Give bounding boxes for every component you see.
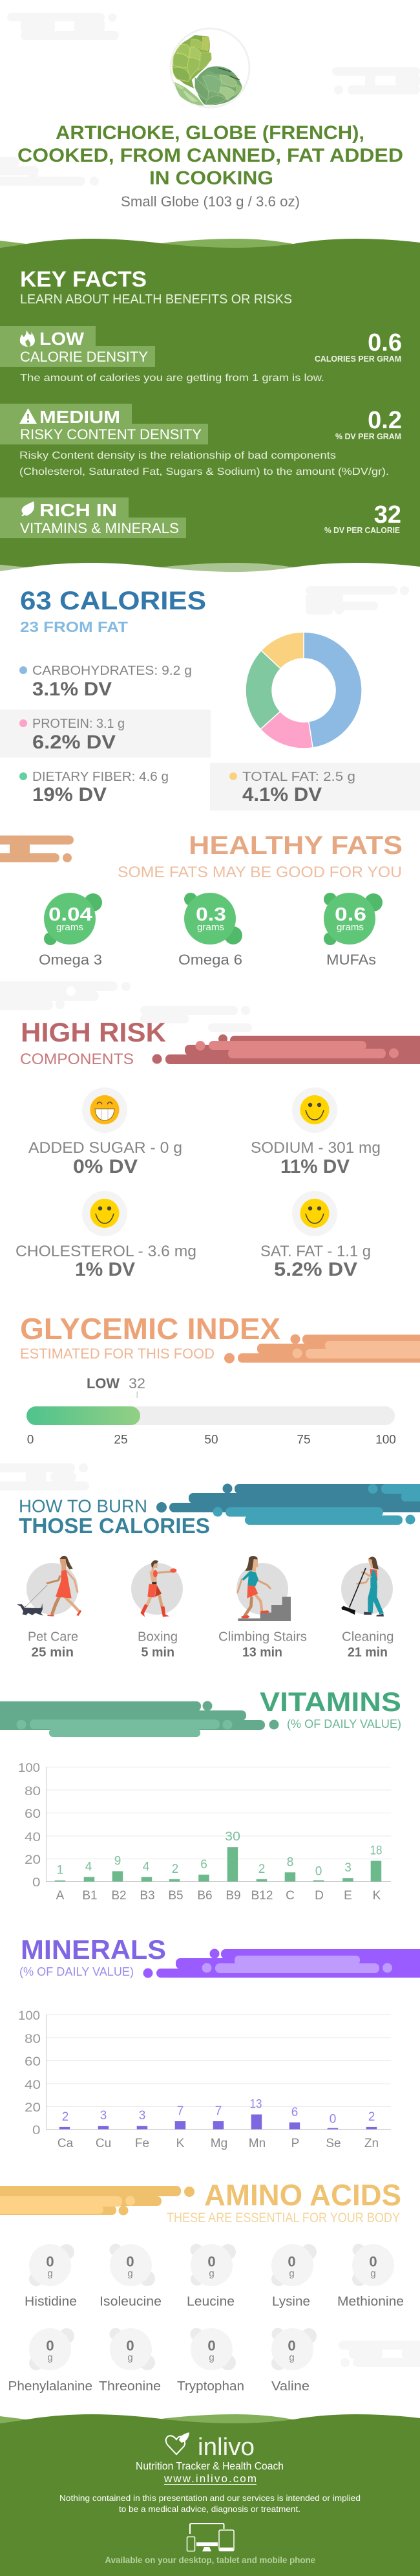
activity: pet care: Pet Care: [28, 1630, 78, 1644]
heading: vitamins: VITAMINS: [260, 1686, 401, 1717]
disclaimer: [59, 2493, 361, 2514]
risk: added sugar: 0% DV: [73, 1156, 138, 1177]
tagline: Nutrition Tracker & Health Coach: [136, 2460, 284, 2472]
risk: sodium: 11% DV: [280, 1156, 350, 1177]
fact: low calorie density: [0, 326, 402, 384]
bar chart: vitamins: B2: [111, 1889, 127, 1903]
heading: glycemic index: GLYCEMIC INDEX: [20, 1312, 280, 1346]
macro: dietary fiber: DIETARY FIBER: 4.6 g: [32, 770, 169, 784]
decoration: glycemic index streaks: [224, 1334, 420, 1364]
activity: climbing stairs: 13 min: [242, 1646, 282, 1660]
bar chart: minerals: 100: [18, 2009, 40, 2023]
bar chart: vitamins: 3: [344, 1861, 352, 1875]
bar chart: vitamins: C: [286, 1889, 295, 1903]
activity: climbing stairs: [218, 1556, 307, 1660]
subheading: health benefits: LEARN ABOUT HEALTH BENEFITS OR RISKS: [20, 292, 292, 307]
amino acid: methionine: [337, 2243, 404, 2309]
bar chart: minerals: 2: [62, 2110, 68, 2124]
bar chart: minerals: Mn: [249, 2137, 266, 2150]
fact: medium risky content density: % DV PER GRAM: [335, 431, 401, 441]
bar chart: vitamins: 18: [370, 1844, 383, 1858]
amino acid: lysine: 0: [288, 2254, 296, 2269]
chart: glycemic index bar: 75: [297, 1434, 311, 1446]
bar chart: vitamins: K: [373, 1889, 381, 1903]
subheading: vitamins: (% OF DAILY VALUE): [287, 1718, 401, 1730]
bar chart: vitamins: 0: [32, 1876, 40, 1890]
fact: rich in vitamins and minerals: VITAMINS & MINERALS: [20, 520, 179, 536]
fat: omega 6: 0.3: [196, 904, 226, 925]
chart: glycemic index bar: 32: [129, 1375, 145, 1392]
macro: carbohydrates: [19, 664, 192, 700]
bar chart: minerals: 6: [291, 2106, 298, 2119]
fat: omega 6: Omega 6: [178, 952, 242, 968]
amino acid: threonine: Threonine: [99, 2379, 161, 2394]
fact: low calorie density: CALORIE DENSITY: [20, 349, 148, 365]
activity: climbing stairs: Climbing Stairs: [218, 1630, 307, 1644]
amino acid: phenylalanine: g: [47, 2352, 53, 2363]
amino acid: isoleucine: Isoleucine: [100, 2295, 162, 2309]
macro: carbohydrates: 3.1% DV: [32, 679, 112, 700]
subheading: components: COMPONENTS: [20, 1051, 134, 1068]
bar chart: vitamins: [18, 1762, 391, 1903]
disclaimer: Nothing contained in this presentation and our services is intended or implied: [59, 2493, 361, 2503]
fat: omega 3: Omega 3: [39, 952, 102, 968]
subtitle: serving size: Small Globe (103 g / 3.6 oz): [121, 193, 300, 210]
bar chart: vitamins: 40: [25, 1831, 41, 1844]
icon: artichoke photo: [171, 28, 249, 107]
risk: sodium: SODIUM - 301 mg: [251, 1139, 381, 1157]
amino acid: leucine: [187, 2243, 236, 2309]
chart: glycemic index bar: LOW: [87, 1375, 120, 1392]
amino acid: isoleucine: [100, 2243, 162, 2309]
fact: low calorie density: LOW: [39, 329, 85, 349]
bar chart: minerals: 0: [330, 2113, 336, 2126]
fat: mufas: grams: [337, 922, 364, 933]
activity: boxing: Boxing: [138, 1630, 178, 1644]
fact: medium risky content density: [0, 404, 402, 477]
risk: cholesterol: 1% DV: [75, 1259, 135, 1280]
bar chart: minerals: 60: [25, 2055, 41, 2069]
amino acid: threonine: [99, 2328, 161, 2394]
amino acid: isoleucine: 0: [126, 2254, 134, 2269]
risk: saturated fat: 5.2% DV: [274, 1259, 357, 1280]
decoration: minerals streaks: [143, 1948, 420, 1978]
fact: medium risky content density: 0.2: [368, 407, 402, 434]
risk: added sugar: ADDED SUGAR - 0 g: [28, 1139, 182, 1157]
amino acid: threonine: g: [127, 2352, 133, 2363]
bar chart: minerals: 0: [32, 2124, 40, 2137]
bar chart: vitamins: 100: [18, 1762, 40, 1775]
decoration: high risk streaks: [152, 1034, 420, 1064]
amino acid: isoleucine: g: [127, 2268, 133, 2279]
icon: flame: [20, 330, 35, 347]
amino acid: phenylalanine: 0: [46, 2338, 54, 2353]
title: ARTICHOKE, GLOBE (FRENCH),: [56, 122, 364, 144]
bar chart: minerals: 7: [177, 2104, 184, 2118]
macro: total fat: TOTAL FAT: 2.5 g: [242, 770, 355, 784]
amino acid: phenylalanine: [8, 2328, 92, 2394]
fact: rich in vitamins and minerals: RICH IN: [39, 500, 117, 520]
bar chart: minerals: Zn: [364, 2137, 379, 2150]
footer panel: [0, 2414, 420, 2576]
bar chart: vitamins: 30: [225, 1830, 240, 1844]
bar chart: minerals: [18, 2009, 391, 2150]
bar chart: minerals: 20: [25, 2101, 41, 2115]
macro: carbohydrates: CARBOHYDRATES: 9.2 g: [32, 664, 192, 678]
chart: glycemic index bar: 100: [375, 1434, 396, 1446]
amino acid: histidine: Histidine: [25, 2295, 77, 2309]
bar chart: minerals: Mg: [211, 2137, 227, 2150]
availability note: Available on your desktop, tablet and mobile phone: [105, 2555, 315, 2565]
bar chart: vitamins: 6: [200, 1858, 207, 1872]
title: [17, 122, 403, 189]
fat: omega 6: grams: [197, 922, 224, 933]
fact: medium risky content density: (Cholesterol, Saturated Fat, Sugars & Sodium) to the amount (%DV/gr).: [19, 466, 389, 477]
activity: cleaning: 21 min: [348, 1646, 388, 1660]
chart: glycemic index bar: 25: [114, 1434, 128, 1446]
subheading: healthy fats: SOME FATS MAY BE GOOD FOR YOU: [118, 864, 402, 881]
bar chart: vitamins: B1: [82, 1889, 98, 1903]
risk: saturated fat: SAT. FAT - 1.1 g: [260, 1243, 371, 1260]
bar chart: vitamins: A: [56, 1889, 65, 1903]
macro: protein: [0, 710, 211, 758]
bar chart: vitamins: 60: [25, 1807, 41, 1821]
amino acid: histidine: 0: [46, 2254, 54, 2269]
fact: medium risky content density: Risky Content density is the relationship of bad components: [19, 450, 336, 461]
activity: cleaning: Cleaning: [342, 1630, 394, 1644]
amino acid: methionine: Methionine: [337, 2295, 404, 2309]
bar chart: vitamins: B6: [197, 1889, 213, 1903]
bar chart: minerals: Fe: [135, 2137, 149, 2150]
bar chart: minerals: 13: [249, 2097, 262, 2112]
amino acid: methionine: 0: [369, 2254, 377, 2269]
activity: boxing: [131, 1560, 183, 1660]
fat: mufas: [324, 893, 383, 968]
macro: dietary fiber: 19% DV: [32, 784, 107, 805]
title: IN COOKING: [149, 168, 273, 189]
amino acid: tryptophan: [177, 2328, 244, 2394]
heading: minerals: MINERALS: [21, 1934, 166, 1965]
disclaimer: to be a medical advice, diagnosis or treatment.: [119, 2504, 300, 2514]
bar chart: minerals: 40: [25, 2079, 41, 2092]
amino acid: tryptophan: 0: [207, 2338, 216, 2353]
amino acid: tryptophan: Tryptophan: [177, 2379, 244, 2394]
fact: rich in vitamins and minerals: % DV PER CALORIE: [324, 525, 400, 535]
fat: omega 6: [178, 893, 242, 968]
chart: glycemic index bar: 50: [204, 1434, 218, 1446]
macro: protein: 6.2% DV: [32, 732, 116, 753]
risk: saturated fat: [260, 1191, 371, 1280]
subheading: glycemic index: ESTIMATED FOR THIS FOOD: [20, 1346, 215, 1362]
decoration: healthy fats streaks: [0, 836, 74, 862]
bar chart: vitamins: B3: [140, 1889, 155, 1903]
bar chart: vitamins: 2: [172, 1862, 178, 1876]
amino acid: leucine: Leucine: [187, 2295, 235, 2309]
amino acid: threonine: 0: [126, 2338, 134, 2353]
bar chart: vitamins: 2: [258, 1862, 265, 1876]
fat: omega 3: 0.04: [48, 904, 92, 925]
bar chart: vitamins: 8: [287, 1855, 293, 1869]
bar chart: minerals: Cu: [96, 2137, 111, 2150]
heading: healthy fats: HEALTHY FATS: [189, 831, 403, 860]
fat: omega 3: grams: [56, 922, 83, 933]
fact: medium risky content density: MEDIUM: [39, 407, 120, 427]
amino acid: valine: g: [289, 2352, 295, 2363]
fact: low calorie density: CALORIES PER GRAM: [315, 354, 401, 364]
heading: 63 calories: 63 CALORIES: [20, 587, 206, 615]
heading: how to burn those calories: HOW TO BURN: [19, 1496, 147, 1516]
amino acid: lysine: [271, 2244, 317, 2309]
bar chart: vitamins: B12: [251, 1889, 273, 1903]
donut chart: macronutrients: [246, 632, 362, 748]
bar chart: minerals: K: [176, 2137, 185, 2150]
amino acid: leucine: g: [209, 2268, 215, 2279]
subheading: minerals: (% OF DAILY VALUE): [19, 1965, 134, 1978]
bar chart: minerals: 7: [215, 2104, 222, 2118]
amino acid: phenylalanine: Phenylalanine: [8, 2379, 92, 2394]
fat: mufas: 0.6: [335, 904, 366, 925]
bar chart: minerals: 80: [25, 2033, 41, 2046]
activity: pet care: [17, 1556, 81, 1660]
risk: cholesterol: [16, 1191, 196, 1280]
bar chart: vitamins: 1: [57, 1864, 63, 1877]
amino acid: lysine: Lysine: [272, 2295, 310, 2309]
decoration: amino acids streaks: [0, 2186, 194, 2215]
activity: pet care: 25 min: [31, 1646, 74, 1660]
activity: cleaning: [341, 1556, 394, 1660]
fact: low calorie density: The amount of calories you are getting from 1 gram is low.: [20, 373, 324, 384]
decoration: how to burn streaks: [156, 1484, 420, 1525]
bar chart: minerals: Ca: [58, 2137, 74, 2150]
bar chart: vitamins: D: [315, 1889, 324, 1903]
fat: mufas: MUFAs: [326, 952, 376, 968]
heading: how to burn those calories: [19, 1496, 210, 1538]
bar chart: vitamins: 80: [25, 1785, 41, 1798]
fact: rich in vitamins and minerals: [0, 497, 401, 538]
heading: how to burn those calories: THOSE CALORIES: [19, 1514, 210, 1538]
logo: inlivo heart: inlivo: [198, 2434, 255, 2461]
fact: medium risky content density: RISKY CONTENT DENSITY: [20, 426, 202, 442]
amino acid: histidine: g: [47, 2268, 53, 2279]
heading: key facts: KEY FACTS: [20, 267, 147, 292]
bar chart: minerals: Se: [326, 2137, 341, 2150]
bar chart: vitamins: 0: [315, 1864, 322, 1879]
bar chart: vitamins: B9: [226, 1889, 241, 1903]
bar chart: minerals: 2: [368, 2110, 375, 2124]
logo: inlivo heart: [166, 2432, 255, 2461]
subheading: 23 from fat: 23 FROM FAT: [20, 618, 128, 635]
heading: high risk: HIGH RISK: [21, 1017, 166, 1047]
macro: dietary fiber: [19, 770, 169, 805]
chart: glycemic index bar: 0: [27, 1434, 34, 1446]
bar chart: minerals: 3: [100, 2109, 107, 2123]
decoration: vitamins streaks: [0, 1701, 279, 1737]
icon: leaf: [21, 501, 34, 516]
amino acid: valine: Valine: [271, 2379, 310, 2394]
risk: cholesterol: CHOLESTEROL - 3.6 mg: [16, 1243, 196, 1260]
macro: total fat: [210, 763, 420, 811]
amino acid: lysine: g: [289, 2268, 295, 2279]
bar chart: vitamins: E: [344, 1889, 352, 1903]
amino acid: histidine: [25, 2244, 77, 2309]
icon: warning triangle: [19, 408, 37, 424]
amino acid: valine: 0: [288, 2338, 296, 2353]
title: COOKED, FROM CANNED, FAT ADDED: [17, 145, 403, 166]
macro: protein: PROTEIN: 3.1 g: [32, 717, 125, 731]
fat: omega 3: [39, 893, 102, 968]
bar chart: minerals: P: [291, 2137, 299, 2150]
macro: total fat: 4.1% DV: [242, 784, 322, 805]
fact: low calorie density: 0.6: [368, 329, 402, 356]
amino acid: leucine: 0: [207, 2254, 216, 2269]
amino acid: valine: [271, 2328, 317, 2394]
activity: boxing: 5 min: [141, 1646, 174, 1660]
bar chart: minerals: 3: [139, 2109, 145, 2123]
bar chart: vitamins: 4: [85, 1860, 92, 1873]
risk: added sugar: [28, 1087, 182, 1177]
fact: rich in vitamins and minerals: 32: [374, 501, 401, 529]
heading: amino acids: AMINO ACIDS: [204, 2178, 401, 2212]
bar chart: vitamins: 20: [25, 1853, 41, 1867]
panel: key facts: [0, 239, 420, 572]
chart: glycemic index bar: [26, 1375, 396, 1446]
amino acid: methionine: g: [370, 2268, 376, 2279]
icon: devices: [187, 2524, 234, 2551]
bar chart: vitamins: 4: [143, 1860, 150, 1873]
amino acid: tryptophan: g: [209, 2352, 215, 2363]
bar chart: vitamins: B5: [168, 1889, 184, 1903]
risk: sodium: [251, 1087, 381, 1177]
bar chart: vitamins: 9: [114, 1854, 121, 1868]
website link: www.inlivo.com: [163, 2472, 257, 2485]
